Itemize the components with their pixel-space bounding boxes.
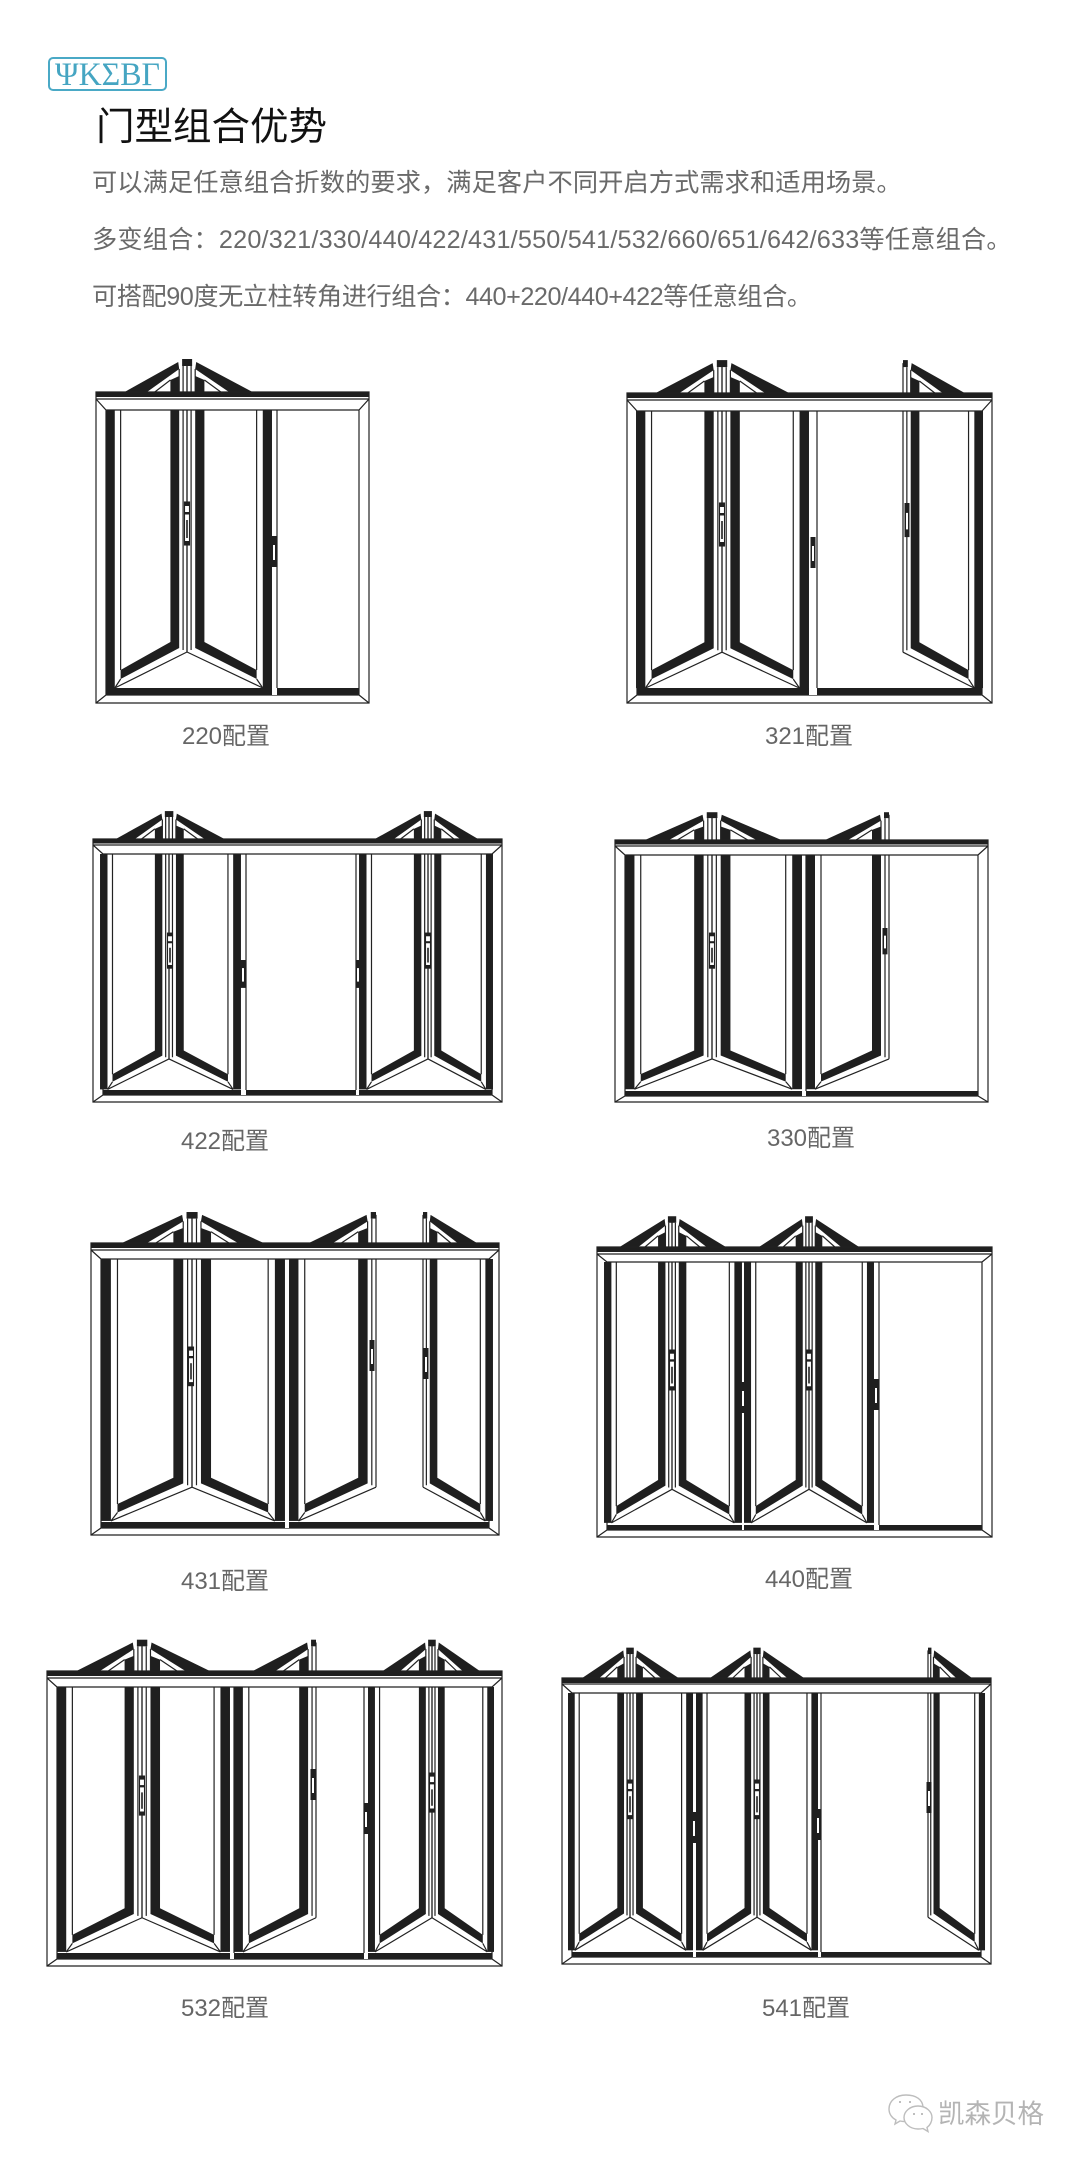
door diagram: 321 bbox=[627, 360, 992, 703]
door diagram: 330 bbox=[615, 812, 988, 1102]
door diagram: 422 bbox=[93, 811, 502, 1102]
caption: 431: 431配置 bbox=[181, 1568, 269, 1595]
title: 门型组合优势 bbox=[96, 106, 327, 149]
door diagram: 532 bbox=[47, 1640, 502, 1966]
door diagram: 220 bbox=[96, 359, 369, 703]
caption: 541: 541配置 bbox=[762, 1995, 850, 2022]
caption: 440: 440配置 bbox=[765, 1566, 853, 1593]
watermark text: 凯森贝格 bbox=[938, 2099, 1044, 2129]
caption: 330: 330配置 bbox=[767, 1125, 855, 1152]
door diagram: 431 bbox=[91, 1212, 499, 1535]
text block: description: 可搭配90度无立柱转角进行组合：440+220/440+422等任意组合。 bbox=[92, 283, 812, 311]
door diagram: 541 bbox=[562, 1648, 991, 1964]
caption: 220: 220配置 bbox=[182, 723, 270, 750]
caption: 321: 321配置 bbox=[765, 723, 853, 750]
caption: 532: 532配置 bbox=[181, 1995, 269, 2022]
door diagram: 440 bbox=[597, 1216, 992, 1537]
text block: description bbox=[92, 169, 1012, 311]
caption: 422: 422配置 bbox=[181, 1128, 269, 1155]
text block: description: 多变组合：220/321/330/440/422/431/550/541/532/660/651/642/633等任意组合。 bbox=[92, 226, 1012, 254]
icon: wechat bbox=[889, 2095, 932, 2132]
text block: description: 可以满足任意组合折数的要求，满足客户不同开启方式需求和适用场景。 bbox=[92, 169, 902, 197]
logo: ΨKΣBΓ bbox=[55, 57, 160, 93]
